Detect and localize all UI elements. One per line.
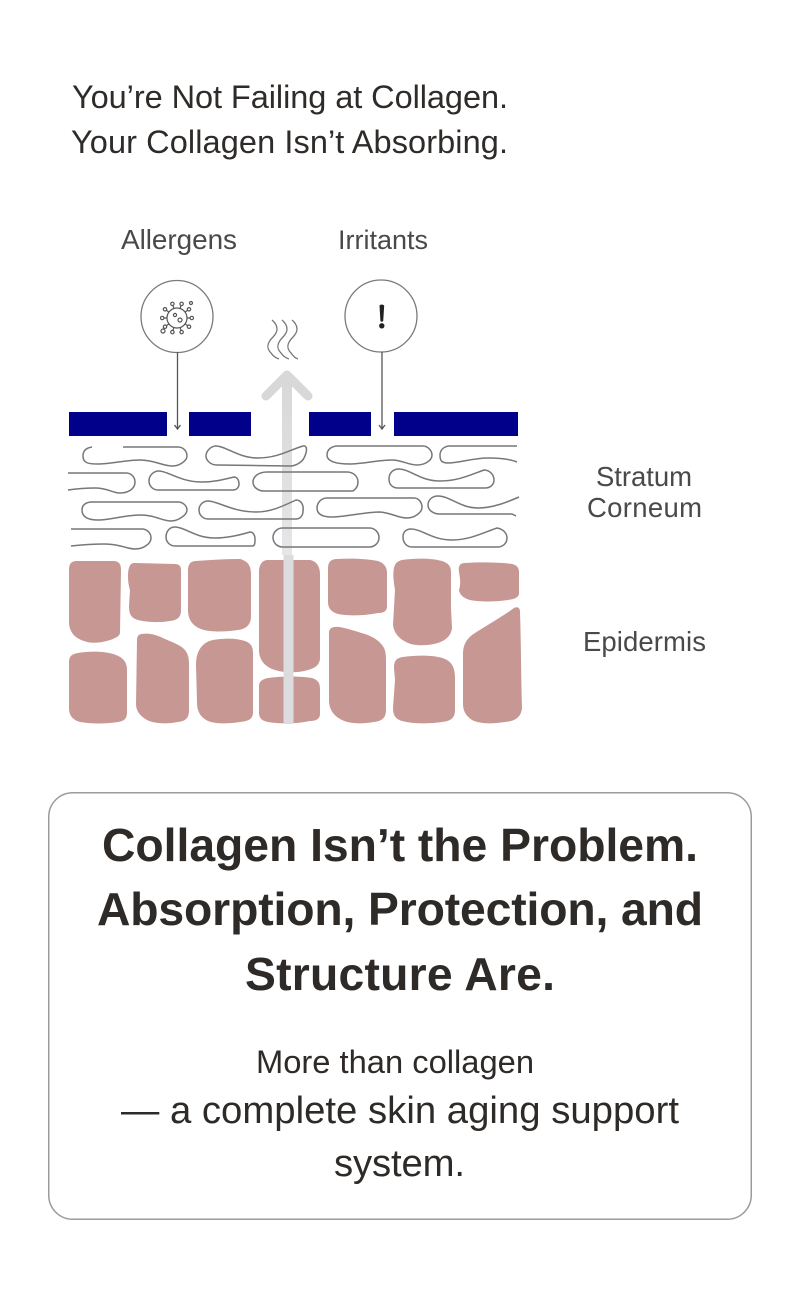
icon: allergen circle with virus [141,280,213,352]
stratum corneum lipid outlines [68,446,519,549]
callout heading: Structure Are. [245,948,555,1000]
callout subtext [121,1043,679,1185]
callout subtext: — a complete skin aging support [121,1089,679,1132]
title [71,79,508,160]
skin diagram [68,224,706,724]
label: Stratum Corneum: Corneum [587,492,702,523]
epidermis cells [69,559,522,724]
arrow: allergens to barrier [174,352,180,429]
title: Your Collagen Isn’t Absorbing. [71,124,508,160]
icon: water vapor waves [268,320,298,359]
callout subtext: More than collagen [256,1043,534,1080]
icon: irritant circle with exclamation [345,280,417,352]
callout heading: Absorption, Protection, and [97,883,703,935]
upward arrow: transepidermal water loss [266,375,308,724]
barrier bricks [69,412,518,436]
callout heading: Collagen Isn’t the Problem. [102,819,698,871]
label: Stratum Corneum: Stratum [596,461,692,492]
label: Epidermis: Epidermis [583,626,706,657]
arrow: irritants to barrier [379,352,385,429]
title: You’re Not Failing at Collagen. [72,79,508,115]
label: Allergens: Allergens [121,224,237,255]
callout subtext: system. [334,1142,465,1185]
callout heading [97,819,703,1000]
label: Stratum Corneum [587,461,702,523]
callout panel [49,793,751,1219]
label: Irritants: Irritants [338,225,428,255]
